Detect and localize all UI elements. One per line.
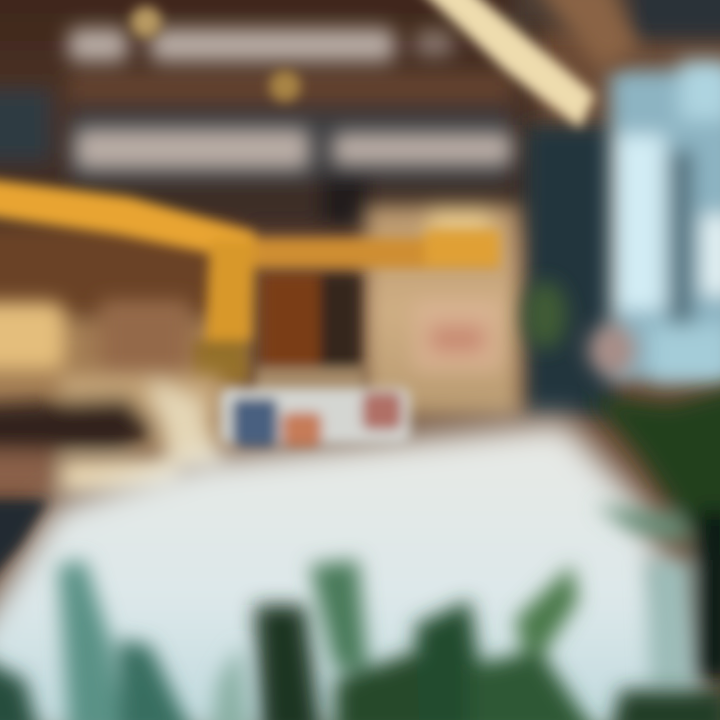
panel: orange lit beams — [0, 178, 500, 382]
icon: ceiling lights — [130, 6, 301, 102]
panel: left furnishings — [0, 300, 225, 496]
panel: right plant — [523, 281, 720, 690]
panel: window — [610, 60, 720, 385]
panel: pillows — [220, 388, 410, 446]
panel: ceiling beam — [530, 0, 640, 70]
panel: right dark column — [510, 0, 720, 415]
icon: cream ceiling beam — [415, 0, 595, 128]
panel: dark wood door — [255, 274, 365, 404]
panel: back wall — [365, 205, 520, 415]
icon: dark corner object — [0, 500, 48, 585]
panel: bed — [0, 420, 710, 720]
panel: ceiling and wood background — [0, 0, 540, 450]
panel: foreground leaves — [0, 560, 720, 720]
heading: blurred title lines — [68, 28, 512, 170]
